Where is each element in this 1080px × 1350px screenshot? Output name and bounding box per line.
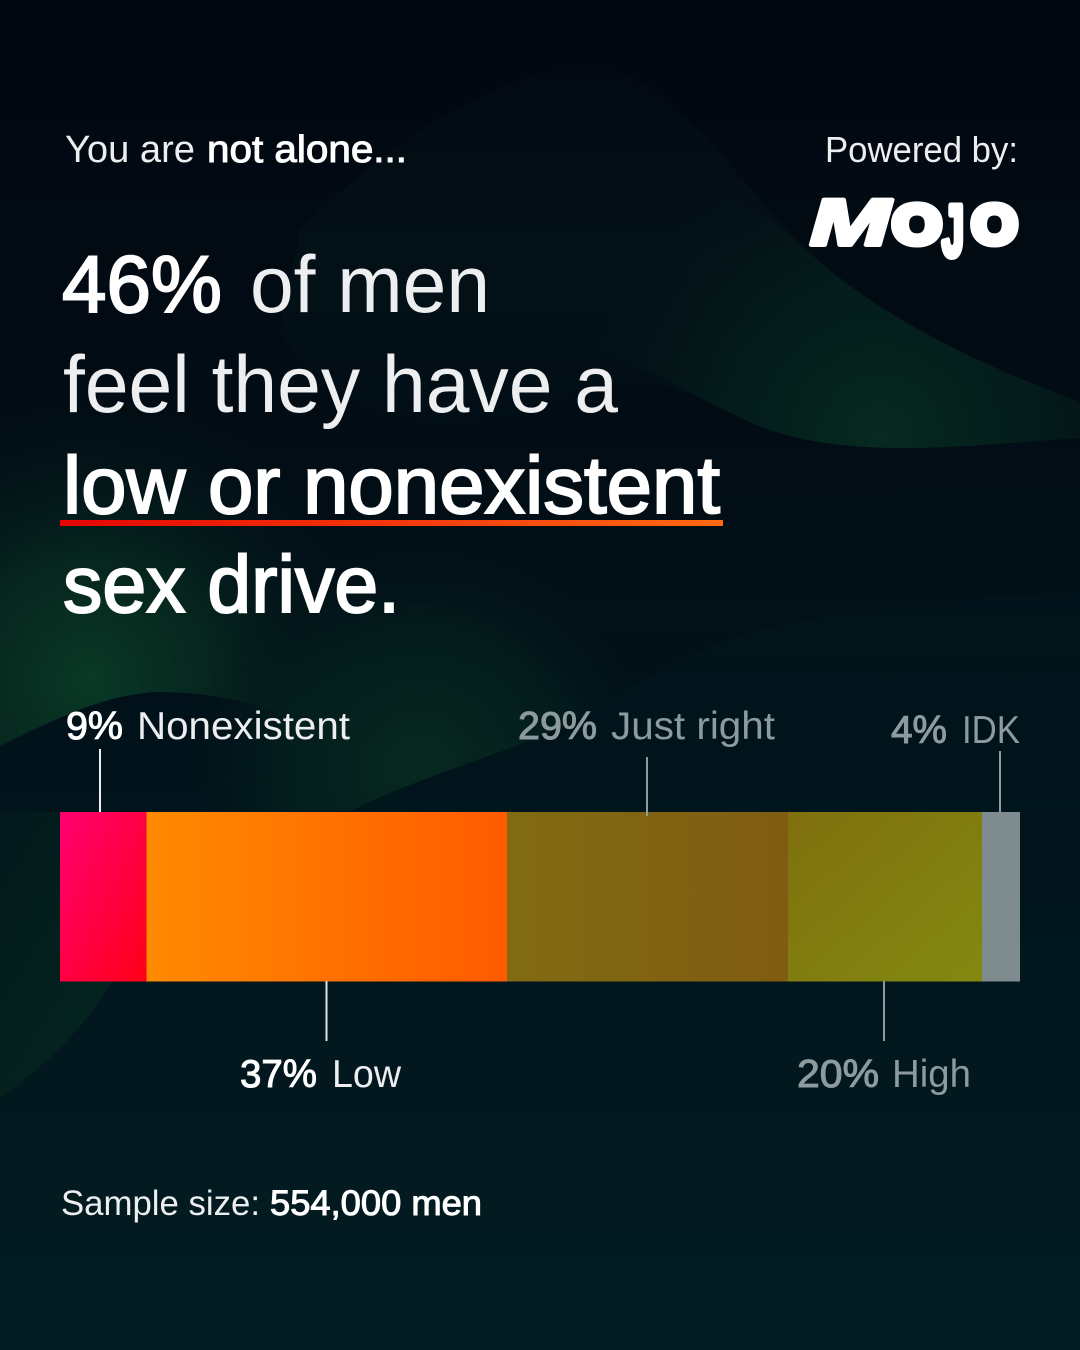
powered by label: Powered by: bbox=[825, 129, 1018, 170]
headline bbox=[60, 240, 723, 630]
kicker: not alone... bbox=[207, 129, 407, 171]
logo: MOJO bbox=[810, 185, 1017, 272]
label: 29% Just right: 29% bbox=[518, 705, 597, 748]
label: 4% IDK: IDK bbox=[962, 709, 1020, 752]
headline line 3: low or nonexistent bbox=[63, 441, 720, 531]
segment: high 20% bbox=[788, 812, 982, 982]
segment: just right 29% bbox=[507, 812, 788, 982]
label: 20% High bbox=[797, 981, 971, 1096]
kicker: You are bbox=[65, 129, 195, 171]
background band: middle bbox=[150, 530, 760, 812]
sample size note bbox=[61, 1184, 482, 1223]
logo: MOJO: O bbox=[972, 195, 1017, 255]
headline line 2: feel they have a bbox=[63, 340, 619, 430]
logo: MOJO: J bbox=[942, 192, 964, 272]
label: 9% Nonexistent: Nonexistent bbox=[137, 705, 350, 748]
label: 37% Low: Low bbox=[332, 1053, 402, 1096]
background wave: faint right bbox=[351, 592, 1080, 812]
headline line 1 bbox=[62, 240, 490, 330]
label: 4% IDK bbox=[891, 709, 1020, 813]
label: 20% High: 20% bbox=[797, 1053, 879, 1096]
headline underline bbox=[60, 520, 723, 526]
label: 9% Nonexistent bbox=[66, 705, 350, 812]
segment: idk 4% bbox=[982, 812, 1020, 982]
logo: MOJO: O bbox=[893, 195, 941, 255]
label: 29% Just right bbox=[518, 705, 775, 816]
background wave: faint mountain bbox=[280, 67, 1080, 448]
label: 37% Low: 37% bbox=[240, 1053, 317, 1096]
background wave: lower left bbox=[0, 812, 180, 1098]
kicker bbox=[65, 129, 407, 171]
label: 29% Just right: Just right bbox=[611, 705, 775, 748]
logo: MOJO: M bbox=[810, 185, 893, 259]
stacked bar chart bbox=[60, 812, 1020, 982]
segment: low 37% bbox=[146, 812, 507, 982]
headline line 4: sex drive. bbox=[63, 540, 400, 630]
label: 20% High: High bbox=[892, 1053, 971, 1096]
background wave: green upper right bbox=[560, 178, 1080, 448]
label: 4% IDK: 4% bbox=[891, 709, 947, 752]
sample size note: 554,000 men bbox=[270, 1184, 482, 1223]
segment: nonexistent 9% bbox=[60, 812, 146, 982]
headline line 1: 46% bbox=[62, 240, 222, 330]
label: 9% Nonexistent: 9% bbox=[66, 705, 123, 748]
label: 37% Low bbox=[240, 981, 402, 1096]
background glow: left bbox=[0, 380, 420, 746]
headline line 1: of men bbox=[250, 240, 490, 330]
sample size note: Sample size: bbox=[61, 1184, 260, 1223]
